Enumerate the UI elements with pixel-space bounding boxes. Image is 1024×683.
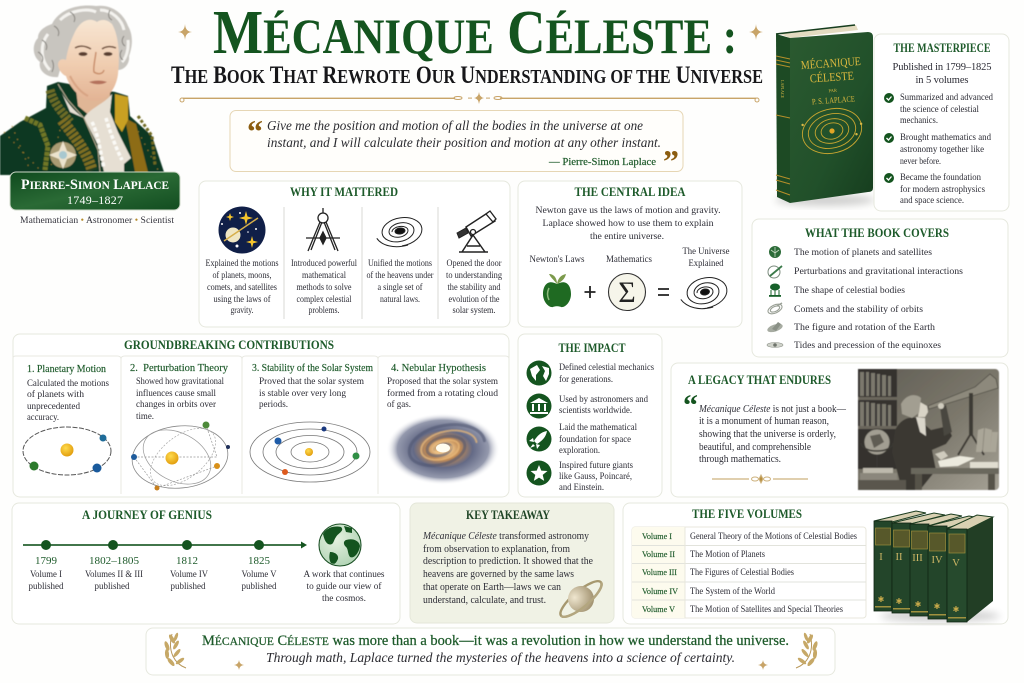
panel: groundbreaking contributions: GROUNDBREAKING CONTRIBUTIONS: [124, 338, 334, 352]
book cover title: [800, 54, 864, 107]
five books illustration: ✱: [915, 600, 922, 609]
icon: rocket: [526, 426, 552, 452]
volumes table: [632, 527, 866, 618]
book cover orbits: [798, 102, 868, 160]
timeline labels: Volume IV: [170, 569, 208, 579]
icon: left laurel: [163, 632, 186, 668]
icon: apple: [543, 274, 571, 307]
masterpiece list: [900, 92, 993, 205]
panel: the five volumes: THE FIVE VOLUMES: [692, 507, 802, 521]
why it mattered texts: mathematical: [302, 270, 346, 280]
panel: a journey of genius: [12, 503, 400, 624]
contribution 1: planetary motion: 1. Planetary Motion: [27, 364, 107, 375]
panel: the five volumes: [623, 503, 1008, 624]
covers list: The figure and rotation of the Earth: [794, 322, 935, 332]
timeline labels: Volume V: [242, 569, 277, 579]
icon: galaxy: [678, 275, 729, 312]
panel: a legacy that endures: [671, 363, 1008, 497]
why it mattered texts: Introduced powerful: [291, 258, 357, 268]
contribution 3: stability of the solar system: periods.: [259, 399, 288, 409]
equals sign: [658, 289, 669, 295]
why it mattered texts: Unified the motions: [368, 258, 432, 268]
why it mattered texts: the stability and: [448, 282, 501, 292]
panel: why it mattered: WHY IT MATTERED: [290, 185, 398, 199]
contribution 3: stability of the solar system: 3. Stability of the Solar System: [252, 363, 373, 374]
title stars and divider: [178, 24, 763, 104]
spine numerals: III: [912, 553, 923, 564]
covers list: The motion of planets and satellites: [794, 247, 932, 257]
why it mattered texts: of the heavens under: [366, 270, 434, 280]
portrait of Laplace: [0, 6, 165, 175]
timeline labels: 1812: [176, 555, 198, 567]
volumes table: Volume I: [642, 531, 672, 541]
icon: institution: [526, 394, 552, 418]
spine numerals: [879, 552, 960, 569]
globe caption: A work that continues: [304, 569, 385, 579]
icon: small stars: [234, 660, 768, 670]
covers list: [794, 247, 963, 350]
impact text: and Einstein.: [559, 482, 604, 492]
takeaway text: Mécanique Céleste transformed astronomy: [422, 531, 589, 542]
panel: the central idea: Mathematics: [606, 254, 652, 264]
contribution 3: stability of the solar system: [250, 363, 373, 482]
contribution 2: perturbation theory: influences cause small: [136, 388, 216, 398]
panel: a journey of genius: A JOURNEY OF GENIUS: [82, 508, 212, 522]
name plate: 1749–1827: [67, 193, 123, 207]
icon: saturn: [553, 572, 609, 626]
plus sign: [584, 286, 596, 298]
masterpiece list: astronomy together like: [900, 144, 984, 154]
masterpiece list: the science of celestial: [900, 104, 979, 114]
volumes table: The System of the World: [690, 586, 775, 596]
globe caption: [304, 569, 385, 603]
panel: the masterpiece: THE MASTERPIECE: [894, 41, 990, 55]
volumes table: Volume II: [642, 549, 675, 559]
closing quote: ”: [663, 143, 679, 179]
timeline labels: published: [94, 581, 130, 591]
masterpiece list: never before.: [900, 156, 941, 166]
icon: perturbation dial: [768, 266, 782, 278]
contribution 2: perturbation theory: changes in orbits over: [136, 399, 216, 409]
concentric orbits diagram: [250, 422, 370, 482]
roles caption: Mathematician • Astronomer • Scientist: [20, 215, 174, 226]
quote text: instant, and I will calculate their position and motion at any other instant.: [267, 135, 661, 150]
masterpiece list: mechanics.: [900, 115, 938, 125]
volumes table: The Figures of Celestial Bodies: [690, 567, 794, 577]
contribution 4: nebular hypothesis: formed from a rotating cloud: [387, 388, 498, 398]
contribution 1: planetary motion: [23, 364, 111, 475]
icon: right laurel: [796, 632, 819, 668]
impact text: for generations.: [559, 374, 613, 384]
icon: star: [526, 460, 552, 486]
icon: telescope: [457, 211, 496, 252]
why it mattered texts: Opened the door: [446, 258, 502, 268]
why it mattered texts: of planets, moons,: [212, 270, 272, 280]
title: MÉCANIQUE CÉLESTE :: [213, 0, 737, 67]
takeaway text: from observation to explanation, from: [423, 544, 570, 555]
book illustration: [775, 25, 875, 206]
book cover title: PAR: [828, 88, 837, 93]
panel: key takeaway: [410, 503, 614, 626]
why it mattered texts: solar system.: [452, 305, 496, 315]
why it mattered texts: problems.: [308, 305, 340, 315]
legacy quote: beautiful, and comprehensible: [699, 442, 811, 453]
timeline labels: 1802–1805: [89, 555, 140, 567]
panel: the central idea: Explained: [688, 258, 724, 268]
panel: the impact: [518, 334, 662, 497]
impact text: Defined celestial mechanics: [559, 362, 654, 372]
panel: the central idea: Newton's Laws: [530, 254, 585, 264]
check icons: [884, 93, 894, 183]
contribution 1: planetary motion: Calculated the motions: [27, 378, 109, 388]
why it mattered texts: complex celestial: [296, 294, 352, 304]
timeline labels: published: [28, 581, 64, 591]
five books illustration: ✱: [934, 602, 941, 611]
contribution 1: planetary motion: unprecedented: [27, 401, 80, 411]
panel: key takeaway: KEY TAKEAWAY: [466, 508, 550, 522]
five books illustration: ✱: [878, 595, 885, 604]
volumes table: Volume V: [642, 604, 676, 614]
closing subline: Through math, Laplace turned the mysteries of the heavens into a science of certainty.: [266, 650, 735, 665]
five books illustration: ✱: [953, 605, 960, 614]
masterpiece list: for modern astrophysics: [900, 184, 985, 194]
takeaway text: description to prediction. It showed that the: [423, 556, 594, 567]
why it mattered texts: evolution of the: [448, 294, 500, 304]
takeaway text: understand, calculate, and trust.: [423, 595, 546, 606]
icon: sigma circle: Σ: [618, 276, 636, 309]
why it mattered texts: natural laws.: [380, 294, 420, 304]
icon: planet and stars: [218, 206, 266, 254]
timeline: [23, 540, 307, 550]
panel: closing statement: [146, 628, 835, 675]
book cover title: P. S. LAPLACE: [812, 93, 855, 106]
contribution 4: nebular hypothesis: 4. Nebular Hypothesis: [391, 363, 486, 374]
icon: planet globe: [769, 246, 781, 258]
masterpiece list: Became the foundation: [900, 172, 981, 182]
impact text: exploration.: [559, 445, 600, 455]
name plate: [10, 172, 180, 210]
legacy quote: through mathematics.: [699, 454, 781, 465]
contribution 2: perturbation theory: time.: [136, 411, 154, 421]
covers list: The shape of celestial bodies: [794, 285, 905, 295]
panel: the central idea: Newton gave us the laws of motion and gravity.: [536, 205, 720, 216]
panel: the masterpiece: [874, 34, 1009, 211]
why it mattered texts: a single set of: [378, 282, 423, 292]
contribution 3: stability of the solar system: Proved that the solar system: [259, 376, 364, 386]
impact text: Used by astronomers and: [559, 394, 648, 404]
impact text: foundation for space: [559, 434, 631, 444]
icon: earth globe: [319, 524, 361, 566]
contribution 4: nebular hypothesis: [386, 363, 500, 485]
panel: the central idea: [518, 181, 742, 327]
legacy quote: it is a monument of human reason,: [699, 416, 829, 427]
volumes table: Volume IV: [642, 586, 679, 596]
volumes table: General Theory of the Motions of Celestial Bodies: [690, 531, 857, 541]
quote panel: [230, 110, 683, 179]
why it mattered texts: to understanding: [446, 270, 502, 280]
panel: groundbreaking contributions: [13, 334, 509, 497]
contribution 2: perturbation theory: [129, 363, 231, 497]
perturbation diagram: [129, 417, 231, 497]
spine numerals: V: [952, 558, 960, 569]
legacy quote: showing that the universe is orderly,: [699, 429, 836, 440]
book cover title: CÉLESTE: [809, 68, 854, 86]
book cover title: MÉCANIQUE: [800, 54, 861, 72]
quote text: [267, 118, 661, 150]
covers list: Comets and the stability of orbits: [794, 304, 923, 314]
impact text: scientists worldwide.: [559, 405, 632, 415]
orbit diagram: [23, 427, 111, 475]
contribution 1: planetary motion: accuracy.: [27, 412, 59, 422]
spine numerals: I: [879, 552, 883, 563]
panel: the masterpiece: in 5 volumes: [916, 75, 968, 86]
quote text: Give me the position and motion of all the bodies in the universe at one: [267, 118, 643, 133]
why it mattered texts: Explained the motions: [206, 258, 279, 268]
contribution 2: perturbation theory: Showed how gravitational: [136, 376, 224, 386]
timeline labels: 1825: [248, 555, 270, 567]
timeline labels: [28, 555, 277, 591]
why it mattered texts: comets, and satellites: [207, 282, 277, 292]
quote mark: “: [683, 389, 698, 422]
icon: pavilion: [769, 284, 781, 297]
contribution 2: perturbation theory: 2. Perturbation Theory: [130, 363, 228, 374]
contribution 1: planetary motion: of planets with: [27, 389, 84, 399]
takeaway text: that operate on Earth—laws we can: [423, 582, 561, 593]
ornament: [712, 475, 808, 483]
icon: earth figure: [766, 322, 784, 334]
five books illustration: ✱: [896, 597, 903, 606]
volumes table: Volume III: [642, 567, 677, 577]
panel: the central idea: The Universe: [682, 246, 730, 256]
globe caption: the cosmos.: [322, 593, 366, 603]
timeline labels: Volumes II & III: [85, 569, 143, 579]
masterpiece list: Brought mathematics and: [900, 132, 991, 142]
timeline labels: published: [170, 581, 206, 591]
subtitle: THE BOOK THAT REWROTE OUR UNDERSTANDING OF THE UNIVERSE: [171, 62, 763, 89]
attribution: — Pierre-Simon Laplace: [548, 156, 656, 168]
contribution 3: stability of the solar system: is stable over very long: [259, 388, 346, 398]
timeline labels: published: [242, 581, 277, 591]
spine numerals: IV: [931, 555, 943, 566]
engraving of Laplace at telescope: [858, 369, 999, 490]
impact text: [559, 362, 654, 492]
spine numerals: II: [896, 552, 903, 563]
contribution 4: nebular hypothesis: of gas.: [387, 399, 411, 409]
why it mattered texts: using the laws of: [214, 294, 271, 304]
nebula image: [386, 413, 500, 485]
legacy quote: [698, 404, 847, 465]
icon: spiral galaxy: [374, 215, 424, 250]
globe caption: to guide our view of: [306, 581, 382, 591]
takeaway text: heavens are governed by the same laws: [423, 569, 574, 580]
contribution 4: nebular hypothesis: Proposed that the solar system: [387, 376, 498, 386]
name: PIERRE-SIMON LAPLACE: [21, 177, 169, 193]
opening quote: “: [247, 113, 263, 149]
panel: why it mattered: [199, 181, 510, 327]
book illustration: LAPLACE: [780, 80, 785, 99]
panel: a legacy that endures: A LEGACY THAT ENDURES: [688, 373, 831, 387]
covers list: Tides and precession of the equinoxes: [794, 340, 941, 350]
volumes table: The Motion of Planets: [690, 549, 765, 559]
timeline labels: 1799: [35, 555, 58, 567]
timeline labels: Volume I: [30, 569, 62, 579]
takeaway text: [422, 531, 594, 606]
panel: what the book covers: [752, 219, 1008, 357]
icon: sigma circle: [608, 274, 646, 310]
volumes table: The Motion of Satellites and Special Theories: [690, 604, 843, 614]
impact text: Laid the mathematical: [559, 422, 637, 432]
masterpiece list: and space science.: [900, 195, 964, 205]
icon: tides: [767, 342, 783, 348]
panel: what the book covers: WHAT THE BOOK COVERS: [805, 226, 949, 240]
panel: the masterpiece: Published in 1799–1825: [892, 62, 992, 73]
why it mattered texts: [206, 258, 502, 315]
closing headline: MÉCANIQUE CÉLESTE was more than a book—it was a revolution in how we understand the universe.: [202, 633, 789, 649]
icon: globe: [526, 360, 552, 386]
five books illustration: [874, 511, 1000, 622]
icon: comet rings: [767, 302, 783, 316]
why it mattered texts: methods to solve: [296, 282, 352, 292]
panel: the central idea: Laplace showed how to use them to explain: [542, 218, 714, 229]
covers list: Perturbations and gravitational interactions: [794, 266, 963, 276]
impact text: like Gauss, Poincaré,: [559, 471, 632, 481]
icon: compass: [306, 208, 340, 251]
panel: the impact: THE IMPACT: [558, 341, 626, 355]
masterpiece list: Summarized and advanced: [900, 92, 993, 102]
impact text: Inspired future giants: [559, 460, 633, 470]
legacy quote: Mécanique Céleste is not just a book—: [698, 404, 847, 415]
panel: the central idea: THE CENTRAL IDEA: [574, 185, 686, 199]
panel: the central idea: the entire universe.: [590, 231, 664, 242]
why it mattered texts: gravity.: [230, 305, 254, 315]
